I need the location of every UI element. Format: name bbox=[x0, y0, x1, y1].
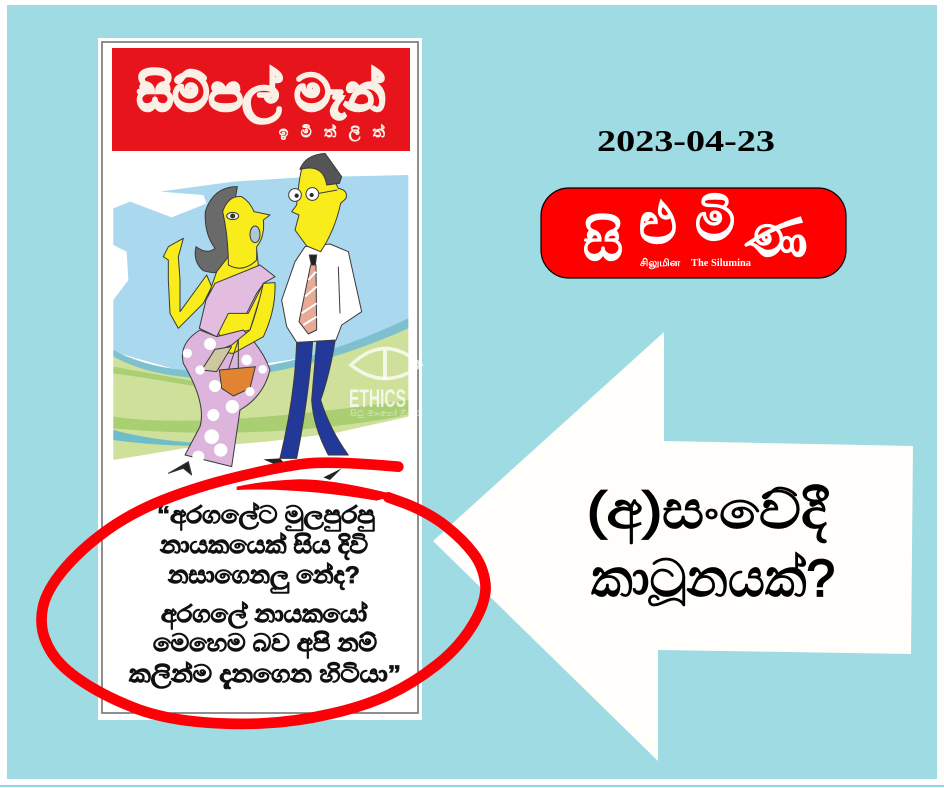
logo wordmark: ණ bbox=[745, 205, 807, 268]
arrow message: (අ)සංවේදී bbox=[587, 482, 828, 544]
forearm bbox=[215, 283, 275, 353]
cartoon caption: අරගලේ නායකයෝ bbox=[161, 600, 368, 630]
cartoon title banner: සිම්පල් මෑන් bbox=[137, 65, 385, 124]
shirt bbox=[282, 244, 362, 342]
logo wordmark: සි bbox=[583, 209, 623, 272]
newspaper logo: Silumina bbox=[541, 188, 846, 278]
shoe bbox=[168, 462, 192, 475]
torso and midriff bbox=[207, 250, 263, 337]
cartoon title banner: ඉමිත්ලිත් bbox=[279, 123, 386, 142]
date: 2023-04-23 bbox=[597, 123, 775, 158]
arrow message bbox=[587, 482, 835, 608]
cartoon caption: නසාගෙනලු නේද? bbox=[167, 561, 360, 594]
man bbox=[280, 153, 362, 458]
cartoon title banner bbox=[112, 48, 410, 151]
raised arm bbox=[163, 238, 212, 328]
arrow message: කාටූනයක්? bbox=[591, 550, 835, 608]
face bbox=[292, 167, 346, 252]
tie stripes bbox=[302, 272, 317, 325]
cartoon caption bbox=[129, 501, 401, 690]
river band bbox=[113, 318, 408, 378]
cartoon caption: මෙහෙම බව අපි නම් bbox=[153, 630, 377, 659]
logo wordmark: මි bbox=[695, 189, 735, 252]
woman bbox=[163, 187, 275, 475]
watermark: ETHICS: සිටු මාංගෝ ඕර්ග bbox=[350, 408, 420, 418]
sari upper bbox=[199, 265, 275, 337]
newspaper logo: Silumina: The Silumina bbox=[691, 258, 751, 269]
handbag bbox=[228, 340, 238, 370]
red hand-drawn circle bbox=[42, 463, 486, 724]
watermark: ETHICS bbox=[349, 348, 421, 418]
green field bbox=[113, 325, 408, 460]
logo subtitle: சிலுமின bbox=[640, 257, 680, 269]
tie bbox=[299, 265, 317, 334]
skirt bbox=[182, 330, 270, 467]
logo wordmark: ළු bbox=[639, 192, 677, 255]
cartoon caption: කලින්ම දැනගෙන හිටියා” bbox=[129, 660, 401, 690]
cartoon caption: නායකයෙක් සිය දිවි bbox=[159, 531, 368, 561]
cartoon illustration: couple bbox=[113, 153, 408, 480]
newspaper cartoon clipping bbox=[98, 38, 422, 720]
face bbox=[223, 197, 270, 268]
skirt dots bbox=[183, 338, 267, 463]
logo wordmark bbox=[583, 189, 807, 272]
glasses bbox=[289, 189, 301, 201]
fan hand bbox=[202, 347, 232, 372]
speech arrow bbox=[433, 332, 913, 761]
watermark: ETHICS: ETHICS bbox=[349, 385, 406, 413]
hair bbox=[195, 187, 237, 273]
trousers bbox=[280, 342, 313, 458]
cartoon caption: “අරගලේට මුලපුරපු bbox=[157, 501, 375, 531]
hair bbox=[300, 153, 342, 185]
shoes: man bbox=[263, 458, 342, 480]
sky bbox=[113, 175, 408, 372]
